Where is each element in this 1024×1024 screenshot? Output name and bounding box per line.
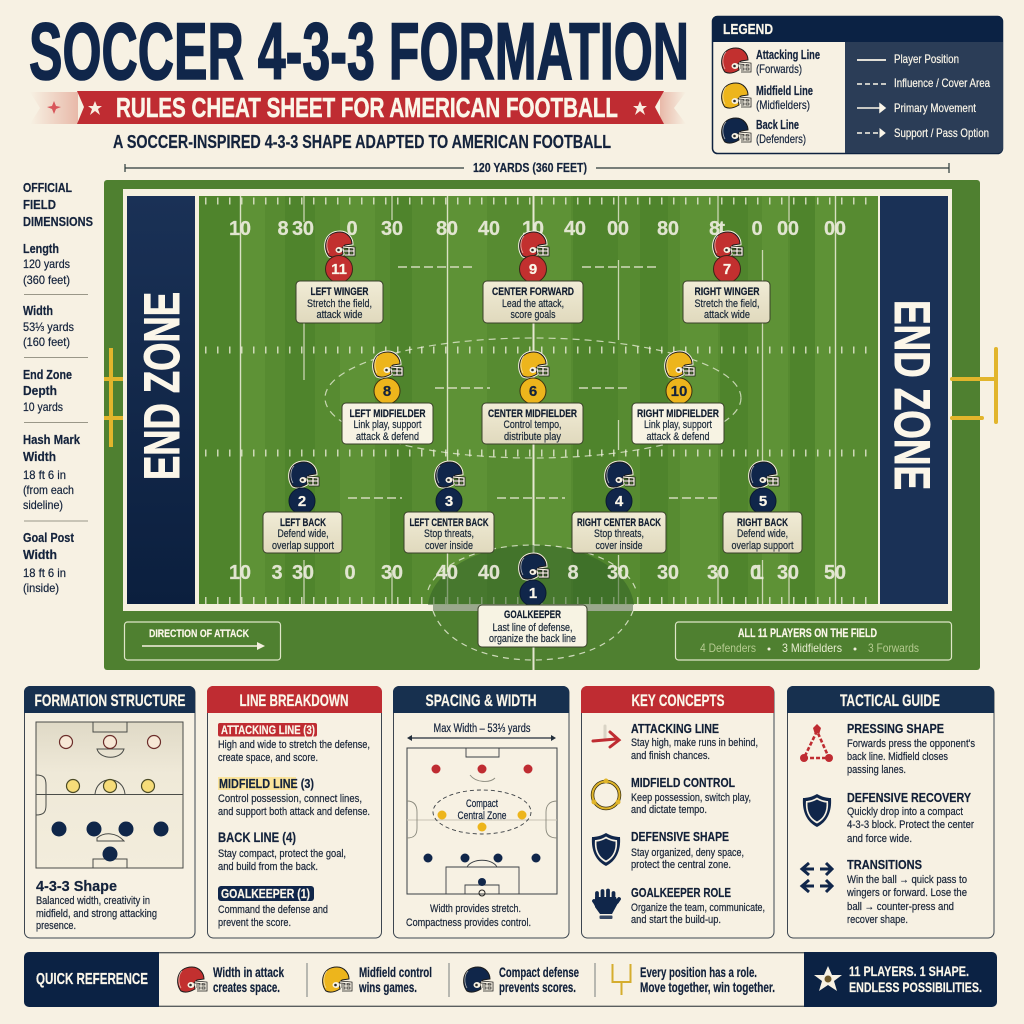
player 9: center forward: Lead the attack,: [502, 298, 564, 310]
panel: official field dimensions: Goal Post: [23, 530, 75, 545]
attacking line: [218, 723, 370, 764]
player 1: goalkeeper: GOALKEEPER: [504, 609, 561, 621]
spacing diagram: Central Zone: [458, 810, 506, 822]
width label: Max Width – 53⅓ yards: [434, 723, 531, 735]
legend: midfield line: [722, 83, 813, 112]
player 9: center forward: score goals: [510, 309, 556, 321]
player 6: center midfielder: 6: [529, 383, 537, 400]
midfield line: MIDFIELD LINE (3): [219, 776, 314, 791]
back line: [218, 829, 346, 873]
midfield line: Control possession, connect lines,: [218, 793, 362, 805]
tactic: defensive recovery: and force wide.: [847, 833, 912, 845]
player count box: 3 Midfielders: [782, 641, 842, 655]
yard numbers: 8t: [709, 218, 725, 240]
panel: official field dimensions: End Zone: [23, 367, 72, 382]
width label: [407, 723, 556, 741]
legend: attacking line: (Forwards): [756, 62, 802, 76]
icon: gold ring: [592, 778, 620, 808]
shape description: Balanced width, creativity in: [36, 895, 150, 907]
tactic: pressing shape: passing lanes.: [847, 764, 906, 776]
legend: back line: Back Line: [756, 118, 799, 132]
shape description: [36, 878, 157, 932]
player count box: ALL 11 PLAYERS ON THE FIELD: [738, 628, 877, 640]
goal post: left: [104, 348, 123, 447]
tactic: transitions: ball → counter-press and: [847, 901, 954, 913]
panel heading: TACTICAL GUIDE: [840, 691, 940, 710]
dashed horizontal guides: [348, 267, 720, 498]
dimension line: field length: 120 YARDS (360 FEET): [473, 160, 587, 175]
player 4: right center back: RIGHT CENTER BACK: [577, 517, 661, 529]
concept: defensive shape: Stay organized, deny space,: [631, 847, 744, 859]
tactic: defensive recovery: Quickly drop into a compact: [847, 806, 963, 818]
player 3: left center back: Stop threats,: [424, 528, 474, 540]
panel: official field dimensions: 53⅓ yards: [23, 320, 74, 334]
legend: midfield line: Midfield Line: [756, 84, 813, 98]
tip: every position: Move together, win together.: [640, 979, 775, 995]
player 1: goalkeeper: [478, 554, 587, 647]
concept: goalkeeper role: [594, 886, 765, 926]
panel: official field dimensions: sideline): [23, 498, 63, 512]
yard numbers: 3: [271, 562, 283, 584]
end zone: left: [127, 196, 195, 604]
goalkeeper area: [428, 545, 636, 660]
player count box: [676, 622, 952, 660]
player 11: left winger: attack wide: [316, 309, 362, 321]
legend: player position: [857, 52, 959, 66]
concept: attacking line: and finish chances.: [631, 750, 710, 762]
tactic: pressing shape: [800, 722, 975, 776]
center circle area: [325, 338, 741, 458]
panel: official field dimensions: Length: [23, 241, 59, 256]
legend: [712, 16, 1003, 154]
player 7: right winger: RIGHT WINGER: [694, 286, 760, 298]
yard numbers: 8: [567, 562, 579, 584]
tactic: transitions: [802, 858, 967, 926]
concept: midfield control: MIDFIELD CONTROL: [631, 776, 735, 790]
concept: goalkeeper role: GOALKEEPER ROLE: [631, 886, 731, 900]
player 4: right center back: 4: [615, 493, 624, 510]
legend: attacking line: [722, 48, 820, 76]
panel: official field dimensions: Width: [23, 449, 56, 464]
tip: midfield control: [323, 964, 432, 995]
concept: attacking line: ATTACKING LINE: [631, 722, 719, 736]
player 11: left winger: 11: [331, 261, 347, 278]
concept: goalkeeper role: Organize the team, communicate,: [631, 902, 765, 914]
back line: and build from the back.: [218, 861, 318, 873]
midfield line: [218, 776, 370, 818]
tip: width in attack: Width in attack: [213, 964, 284, 980]
end zone: right: END ZONE: [884, 300, 940, 490]
dimension line: field length: [125, 160, 949, 175]
heading: dimensions: OFFICIAL: [23, 180, 72, 195]
tip: midfield control: Midfield control: [359, 964, 432, 980]
player 7: right winger: 7: [723, 261, 731, 278]
legend: attacking line: Attacking Line: [756, 48, 820, 62]
player count box: 3 Forwards: [868, 641, 919, 655]
player 4: right center back: Stop threats,: [594, 528, 644, 540]
attacking line: create space, and score.: [218, 752, 318, 764]
legend heading: LEGEND: [723, 21, 773, 38]
spacing caption: Compactness provides control.: [406, 917, 531, 929]
end zone: left: END ZONE: [134, 292, 190, 480]
panel: official field dimensions: (360 feet): [23, 273, 70, 287]
concept: midfield control: and dictate tempo.: [631, 804, 707, 816]
player 4: right center back: [572, 462, 666, 553]
legend: primary movement: [857, 101, 977, 115]
tactic: pressing shape: back line. Midfield closes: [847, 751, 948, 763]
panel heading: SPACING & WIDTH: [426, 691, 536, 710]
concept: midfield control: [592, 776, 751, 816]
yard numbers: 00: [777, 218, 799, 240]
player 11: left winger: LEFT WINGER: [310, 286, 369, 298]
player 8: left midfielder: attack & defend: [356, 431, 419, 443]
concept: defensive shape: [592, 830, 744, 871]
yard numbers: 10: [229, 218, 251, 240]
tip: width in attack: creates space.: [213, 979, 280, 995]
legend: player position: Player Position: [894, 52, 959, 66]
panel: official field dimensions: (160 feet): [23, 335, 70, 349]
panel: official field dimensions: 18 ft 6 in: [23, 468, 66, 482]
tactic: defensive recovery: [803, 791, 974, 845]
field: football pitch: [104, 180, 996, 670]
player 6: center midfielder: CENTER MIDFIELDER: [488, 408, 577, 420]
back line: BACK LINE (4): [218, 829, 296, 845]
yard numbers: 0: [346, 218, 358, 240]
player 8: left midfielder: [342, 352, 433, 444]
icon: red arrow: [593, 726, 619, 747]
panel: official field dimensions: 120 yards: [23, 257, 70, 271]
legend: midfield line: (Midfielders): [756, 98, 810, 112]
goal post: right: [952, 349, 996, 422]
panel: formation structure: [24, 686, 195, 938]
panel: official field dimensions: 18 ft 6 in: [23, 566, 66, 580]
player 9: center forward: [483, 232, 583, 323]
yard numbers: 8: [277, 218, 289, 240]
yard numbers: [229, 218, 846, 584]
panel: key concepts: [581, 686, 774, 938]
heading: dimensions: FIELD: [23, 197, 56, 212]
player 4: right center back: cover inside: [596, 540, 642, 552]
spacing caption: Width provides stretch.: [430, 903, 521, 915]
player 5: right back: Defend wide,: [737, 528, 788, 540]
panel: spacing and width: [393, 686, 569, 938]
attacking line: High and wide to stretch the defense,: [218, 739, 370, 751]
end zone: right: [880, 196, 948, 604]
player 10: right midfielder: Link play, support: [644, 419, 712, 431]
slogan: 11 PLAYERS. 1 SHAPE.: [849, 963, 969, 979]
yard numbers: 30: [381, 562, 403, 584]
shape description: midfield, and strong attacking: [36, 908, 157, 920]
player 7: right winger: attack wide: [704, 309, 750, 321]
player 6: center midfielder: Control tempo,: [504, 419, 562, 431]
yard numbers: 10: [229, 562, 251, 584]
tactic: transitions: TRANSITIONS: [847, 858, 922, 872]
yard numbers: 10: [522, 218, 544, 240]
panel: official field dimensions: (inside): [23, 581, 59, 595]
legend: support option: Support / Pass Option: [894, 126, 989, 140]
panel: tactical guide: [787, 686, 994, 938]
yard numbers: 30: [777, 562, 799, 584]
player 5: right back: 5: [759, 493, 767, 510]
banner: subtitle ribbon: RULES CHEAT SHEET FOR AMERICAN FOOTBALL: [116, 92, 618, 123]
player 2: left back: [263, 462, 342, 553]
player 8: left midfielder: Link play, support: [354, 419, 422, 431]
yard numbers: 01: [750, 562, 764, 584]
goalkeeper: prevent the score.: [218, 917, 291, 929]
player 6: center midfielder: distribute play: [504, 431, 561, 443]
legend: influence area: Influence / Cover Area: [894, 76, 990, 90]
tip: every position: [612, 964, 775, 995]
yard numbers: 0: [344, 562, 356, 584]
player 1: goalkeeper: Last line of defense,: [492, 622, 572, 634]
player 7: right winger: [683, 232, 770, 323]
player 3: left center back: [404, 462, 494, 553]
player 2: left back: overlap support: [272, 540, 334, 552]
midfield line: and support both attack and defense.: [218, 806, 370, 818]
back line: Stay compact, protect the goal,: [218, 848, 346, 860]
tactic: defensive recovery: 4-3-3 block. Protect the center: [847, 819, 974, 831]
icon: transition arrows: [802, 863, 832, 892]
player 10: right midfielder: attack & defend: [646, 431, 710, 443]
yard numbers: 00: [607, 218, 629, 240]
concept: goalkeeper role: and start the build-up.: [631, 914, 721, 926]
player 6: center midfielder: [482, 352, 583, 444]
player 2: left back: LEFT BACK: [280, 517, 326, 529]
goalkeeper: GOALKEEPER (1): [221, 886, 310, 901]
yard numbers: 30: [657, 562, 679, 584]
slogan: ENDLESS POSSIBILITIES.: [849, 979, 982, 995]
player 10: right midfielder: [632, 352, 724, 444]
yard numbers: 40: [478, 218, 500, 240]
player 9: center forward: CENTER FORWARD: [492, 286, 574, 298]
player 5: right back: RIGHT BACK: [737, 517, 788, 529]
yard numbers: 30: [292, 562, 314, 584]
direction of attack box: [124, 622, 280, 660]
yard numbers: 80: [657, 218, 679, 240]
panel heading: LINE BREAKDOWN: [240, 691, 348, 710]
legend: primary movement: Primary Movement: [894, 101, 977, 115]
quick reference heading: QUICK REFERENCE: [36, 971, 148, 988]
panel: official field dimensions: Width: [23, 547, 57, 562]
subtitle: A SOCCER-INSPIRED 4-3-3 SHAPE ADAPTED TO AMERICAN FOOTBALL: [113, 132, 611, 152]
panel: line breakdown: [207, 686, 382, 938]
heading: dimensions: DIMENSIONS: [23, 214, 93, 229]
tip: every position: Every position has a role.: [640, 964, 757, 980]
quick reference bar: [24, 952, 997, 1007]
yard numbers: 80: [436, 218, 458, 240]
tip: compact defense: Compact defense: [499, 964, 579, 980]
slogan: [814, 963, 982, 995]
icon: pressing triangle: [800, 724, 833, 762]
tactic: pressing shape: Forwards press the opponent's: [847, 738, 975, 750]
player 2: left back: Defend wide,: [278, 528, 328, 540]
yard numbers: 40: [436, 562, 458, 584]
mini pitch: [36, 722, 183, 868]
player 10: right midfielder: RIGHT MIDFIELDER: [637, 408, 719, 420]
tactic: transitions: wingers or forward. Lose the: [846, 887, 967, 899]
panel heading: FORMATION STRUCTURE: [34, 691, 186, 710]
player 3: left center back: 3: [445, 493, 453, 510]
panel: official field dimensions: [23, 180, 93, 595]
player 3: left center back: LEFT CENTER BACK: [410, 517, 489, 529]
legend: support option: [857, 126, 989, 140]
panel: official field dimensions: Width: [23, 303, 53, 318]
panel: official field dimensions: Depth: [23, 383, 57, 398]
legend: back line: (Defenders): [756, 132, 806, 146]
yard numbers: 30: [292, 218, 314, 240]
player count box: 4 Defenders: [700, 641, 756, 655]
goalkeeper: Command the defense and: [218, 904, 328, 916]
player 9: center forward: 9: [529, 261, 537, 278]
yard numbers: 30: [707, 562, 729, 584]
icon: shield: [592, 833, 620, 866]
tactic: transitions: Win the ball → quick pass to: [847, 874, 967, 886]
player 8: left midfielder: LEFT MIDFIELDER: [350, 408, 426, 420]
concept: defensive shape: DEFENSIVE SHAPE: [631, 830, 729, 844]
goalkeeper: [218, 886, 328, 929]
player 11: left winger: Stretch the field,: [307, 298, 372, 310]
tactic: defensive recovery: DEFENSIVE RECOVERY: [847, 791, 972, 805]
tip: compact defense: [464, 964, 579, 995]
player 11: left winger: [296, 232, 383, 323]
yard numbers: 00: [824, 218, 846, 240]
direction of attack box: DIRECTION OF ATTACK: [149, 628, 249, 640]
shape description: 4-3-3 Shape: [36, 878, 117, 895]
yard numbers: 30: [381, 218, 403, 240]
tip: width in attack: [178, 964, 284, 995]
panel heading: KEY CONCEPTS: [632, 691, 724, 710]
spacing caption: [406, 903, 531, 929]
player 5: right back: overlap support: [732, 540, 794, 552]
yard numbers: 0: [751, 218, 763, 240]
player 1: goalkeeper: 1: [529, 585, 537, 602]
yard numbers: 40: [564, 218, 586, 240]
concept: midfield control: Keep possession, switch play,: [631, 792, 751, 804]
spacing diagram: [407, 748, 557, 896]
concept: attacking line: Stay high, make runs in behind,: [631, 737, 758, 749]
spacing diagram: Compact: [466, 798, 498, 810]
heading: dimensions: [23, 180, 93, 229]
yard numbers: 40: [478, 562, 500, 584]
tip: compact defense: prevents scores.: [499, 979, 576, 995]
tip: midfield control: wins games.: [358, 979, 417, 995]
concept: attacking line: [593, 722, 758, 762]
attacking line: ATTACKING LINE (3): [221, 723, 315, 737]
player 2: left back: 2: [298, 493, 306, 510]
concept: defensive shape: protect the central zone.: [631, 859, 731, 871]
panel: official field dimensions: 10 yards: [23, 400, 63, 414]
player 3: left center back: cover inside: [425, 540, 473, 552]
legend: influence area: [857, 76, 990, 90]
tactic: pressing shape: PRESSING SHAPE: [847, 722, 944, 736]
panel: official field dimensions: (from each: [23, 483, 74, 497]
player 5: right back: [723, 462, 802, 553]
panel: official field dimensions: Hash Mark: [23, 432, 81, 447]
icon: shield: [803, 794, 831, 827]
player 10: right midfielder: 10: [671, 383, 687, 400]
player 1: goalkeeper: organize the back line: [489, 633, 576, 645]
yard numbers: 30: [607, 562, 629, 584]
yard ticks: [205, 201, 875, 600]
yard numbers: 50: [824, 562, 846, 584]
tactic: transitions: recover shape.: [847, 914, 908, 926]
legend: back line: [722, 118, 806, 146]
icon: glove: [594, 890, 619, 919]
player 7: right winger: Stretch the field,: [694, 298, 760, 310]
player 8: left midfielder: 8: [383, 383, 391, 400]
shape description: presence.: [36, 920, 76, 932]
